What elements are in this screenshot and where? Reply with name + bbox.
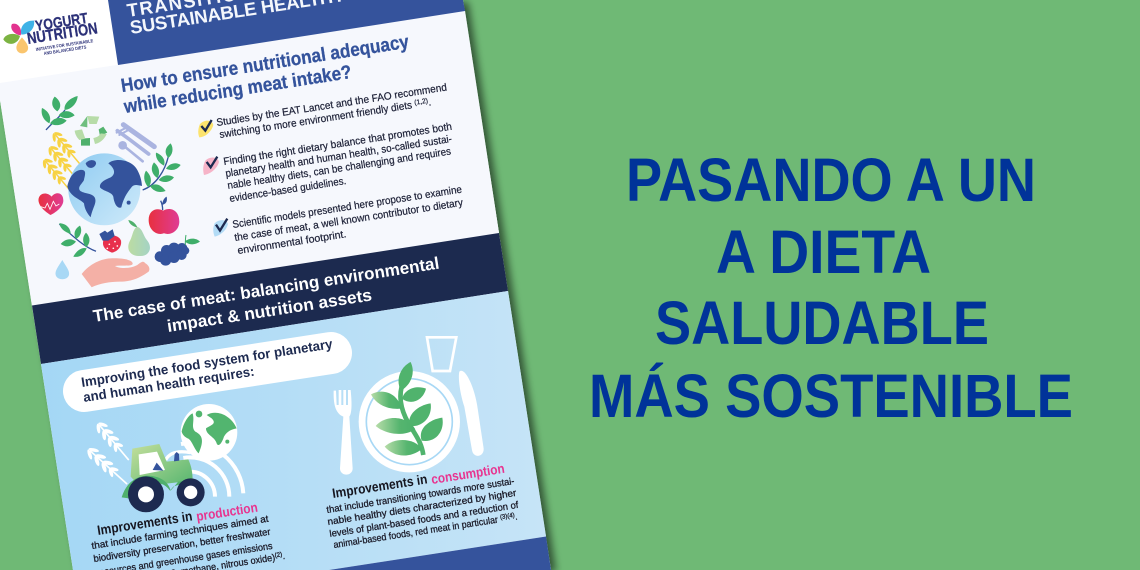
- logo: [3, 10, 99, 56]
- bullet 2: nable healthy diets, can be challenging and requires: [227, 146, 452, 192]
- logo wordmark: AND BALANCED DIETS: [43, 44, 87, 56]
- icon: top-left branch: [42, 96, 78, 130]
- icon: right branch: [143, 143, 181, 192]
- logo wordmark: NUTRITION: [26, 20, 99, 48]
- icon: white arcs: [166, 443, 243, 497]
- icon: globe: [67, 153, 142, 225]
- icon: plant: [371, 362, 443, 456]
- heading: case of meat: The case of meat: balancing environmental: [92, 254, 440, 326]
- header band: [108, 0, 465, 65]
- icon: recycling arrows: [75, 116, 107, 146]
- text: improvements in consumption: that include transitioning towards more sustai-: [326, 476, 515, 516]
- text: improvements in consumption: [326, 461, 520, 551]
- text: improvements in consumption: (3)(4): [500, 512, 515, 521]
- bullet 3: Scientific models presented here propose to examine: [232, 184, 463, 231]
- icon: tractor: [122, 444, 205, 512]
- icon: glass: [427, 337, 456, 371]
- icon: wheat: [39, 128, 85, 195]
- text: improvements in production: [91, 500, 286, 570]
- bullet 3: [213, 184, 464, 257]
- text: improvements in production: .: [282, 551, 286, 562]
- bullet 3: environmental footprint.: [237, 228, 347, 257]
- text: improvements in consumption: .: [514, 512, 518, 523]
- text: improvements in consumption: Improvements in: [331, 471, 428, 501]
- title: pasando a una dieta saludable: [589, 146, 1073, 430]
- bullet 2: [203, 121, 453, 205]
- title: pasando a una dieta saludable: A DIETA: [716, 218, 931, 286]
- heading: how to ensure: How to ensure nutritional adequacy: [120, 32, 411, 97]
- callout: food system requires: Improving the food system for planetary: [80, 336, 334, 390]
- text: improvements in production: Improvements in: [96, 508, 193, 538]
- text: improvements in production: (2): [274, 551, 283, 559]
- icon: pink check: [203, 157, 219, 175]
- logo wordmark: [26, 10, 99, 56]
- bullet 2: Finding the right dietary balance that promotes both: [223, 121, 453, 168]
- icon: fork: [334, 390, 353, 475]
- title: pasando a una dieta saludable: MÁS SOSTENIBLE: [589, 362, 1073, 430]
- bullet 1: (1,2): [414, 98, 429, 107]
- panel: food system section: [41, 291, 546, 570]
- title: pasando a una dieta saludable: SALUDABLE: [655, 289, 989, 357]
- icon: bottom-left branch: [59, 223, 96, 257]
- footer band: [329, 536, 551, 570]
- heading: case of meat: impact & nutrition assets: [166, 286, 373, 336]
- icon: strawberry: [99, 229, 121, 253]
- icon: knife: [459, 371, 484, 456]
- title: pasando a una dieta saludable: PASANDO A UN: [626, 146, 1036, 214]
- bullet list: [198, 81, 464, 257]
- bullet 2: planetary health and human health, so-called sustai-: [225, 133, 453, 180]
- poster sheet: [0, 0, 551, 570]
- icon: heart with pulse: [38, 193, 63, 215]
- callout: food system requires: and human health requires:: [82, 364, 255, 405]
- text: improvements in consumption: animal-based foods, red meat in particular: [333, 513, 512, 551]
- text: improvements in consumption: nable healthy diets characterized by higher: [327, 488, 518, 528]
- illustration: planet and food: [38, 96, 200, 287]
- bullet 1: switching to more environment friendly diets: [219, 98, 422, 141]
- text: improvements in consumption: consumption: [430, 461, 506, 487]
- icon: small globe: [181, 404, 237, 461]
- heading: how to ensure: while reducing meat intake?: [122, 62, 353, 118]
- icon: yellow check: [198, 120, 213, 137]
- text: improvements in production: production: [195, 500, 259, 524]
- icon: grapes: [155, 235, 200, 266]
- text: improvements in consumption: levels of plant-based foods and a reduction of: [329, 500, 520, 540]
- bullet 2: evidence-based guidelines.: [229, 175, 347, 205]
- heading: how to ensure: [120, 32, 411, 118]
- logo wordmark: INITIATIVE FOR SUSTAINABLE: [35, 38, 93, 52]
- icon: hand: [82, 258, 149, 287]
- panel: question section background: [0, 11, 499, 306]
- bullet 3: the case of meat, a well known contributor to dietary: [234, 197, 464, 244]
- icon: cutlery: [117, 125, 154, 161]
- text: improvements in production: biodiversity preservation, better freshwater: [93, 527, 272, 565]
- illustration: tractor and globe: [83, 404, 243, 512]
- panel: case of meat band: [32, 233, 508, 364]
- illustration: plate, cutlery and plant: [334, 337, 484, 475]
- logo wordmark: YOGURT: [34, 10, 89, 35]
- icon: blue check: [213, 219, 228, 237]
- icon: white wheat: [83, 418, 134, 489]
- icon: pear: [128, 220, 150, 256]
- bullet 1: Studies by the EAT Lancet and the FAO recommend: [216, 81, 448, 129]
- icon: plate: [359, 371, 460, 472]
- logo petals: [3, 21, 34, 53]
- text: improvements in production: that include farming techniques aimed at: [91, 514, 270, 552]
- icon: apple: [149, 197, 179, 234]
- bullet 1: .: [427, 96, 432, 109]
- icon: water drop: [55, 260, 69, 279]
